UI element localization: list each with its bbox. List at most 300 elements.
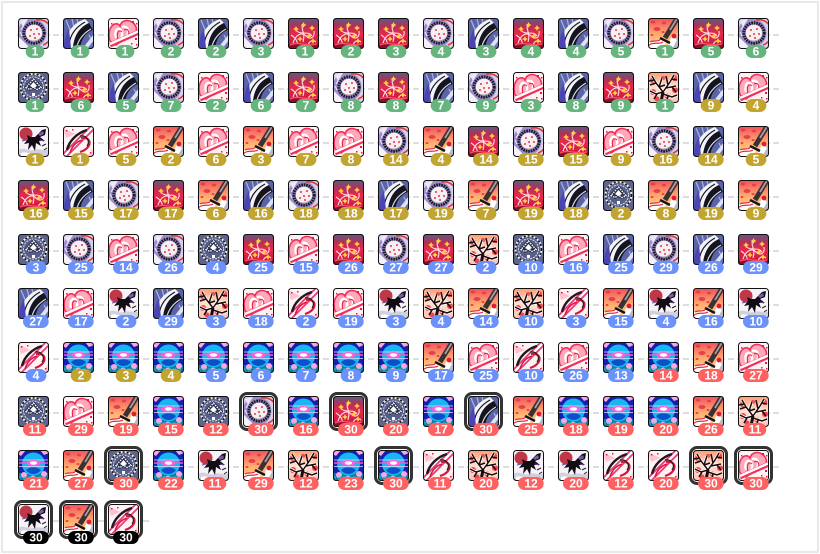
icon: slash, maxed level 30: 30: [119, 530, 133, 544]
icon: blade, level 9: [693, 72, 724, 112]
icon: orb, level 16: [648, 126, 682, 166]
icon: blue ball, level 19: [603, 396, 634, 436]
icon: blue ball, level 2: [63, 342, 94, 382]
icon: katana, level 18: 18: [704, 368, 718, 382]
row 10: black level badges: [16, 502, 152, 544]
row 5: blue level badges: [17, 234, 782, 274]
icon: tree, level 20: 20: [479, 476, 493, 490]
icon: slash, level 10: 10: [524, 368, 538, 382]
icon: orb, level 7: 7: [168, 98, 175, 112]
icon: silver diamond, level 4: [198, 234, 229, 274]
icon: katana, level 25: [513, 395, 544, 436]
icon: red firework, level 2: 2: [348, 44, 355, 58]
icon: dark figure, level 4: 4: [663, 314, 670, 328]
icon: katana, level 14: [468, 287, 499, 328]
icon: slash, level 11: [423, 450, 454, 490]
icon: orb, level 18: 18: [299, 206, 313, 220]
icon: slash, level 10: [513, 342, 544, 382]
icon: pink swirl, level 9: 9: [618, 152, 625, 166]
icon: blue ball, level 21: [18, 450, 49, 490]
icon: silver diamond, level 12: 12: [209, 422, 223, 436]
row 4: gold level badges: [17, 179, 782, 220]
icon: blue ball, level 7: 7: [303, 368, 310, 382]
icon: slash, level 4: 4: [33, 368, 40, 382]
icon: silver diamond, level 2: 2: [618, 206, 625, 220]
icon: katana, level 17: [423, 341, 454, 382]
icon: red firework, level 17: 17: [164, 206, 178, 220]
icon: blade, level 3: [468, 18, 499, 58]
icon: dark figure, level 3: 3: [393, 314, 400, 328]
icon: katana, level 16: [693, 287, 724, 328]
icon: blue ball, level 17: 17: [434, 422, 448, 436]
icon: blade, level 27: 27: [29, 314, 43, 328]
icon: dark figure, level 10: [738, 288, 769, 328]
icon: pink swirl, level 1: [108, 18, 139, 58]
icon: orb, level 6: 6: [753, 44, 760, 58]
icon: pink swirl, level 6: 6: [213, 152, 220, 166]
row 7: blue, gold and red level badges: [17, 341, 782, 382]
icon: blue ball, level 13: [603, 342, 634, 382]
icon: red firework, level 14: 14: [479, 152, 493, 166]
icon: slash, level 20: [648, 450, 679, 490]
icon: blade, level 6: 6: [258, 98, 265, 112]
icon: blade, level 25: 25: [614, 260, 628, 274]
icon: silver diamond, level 1: 1: [32, 98, 39, 112]
icon: blue ball, level 4: [153, 342, 184, 382]
icon: dark figure, level 11: 11: [209, 476, 222, 490]
icon: blade, level 1: 1: [77, 44, 84, 58]
icon: blade, level 26: 26: [704, 260, 718, 274]
icon: katana, level 18: [693, 341, 724, 382]
icon: orb, level 1: 1: [32, 44, 39, 58]
icon: blue ball, maxed level 30: [376, 448, 412, 490]
icon: blue ball, level 16: 16: [299, 422, 313, 436]
row 1: green level badges: [17, 17, 782, 58]
icon: red firework, level 29: [738, 234, 769, 274]
icon: red firework, level 3: 3: [393, 44, 400, 58]
icon: red firework, level 15: [558, 126, 589, 166]
icon: dark figure, level 12: [513, 450, 544, 490]
icon: blue ball, level 5: [198, 342, 229, 382]
icon: dark figure, level 4: [648, 288, 679, 328]
icon: pink swirl, level 25: [468, 342, 499, 382]
icon: pink swirl, level 26: 26: [569, 368, 583, 382]
icon: pink swirl, level 8: 8: [348, 152, 355, 166]
icon: katana, level 26: [693, 395, 724, 436]
icon: orb, level 2: [152, 18, 187, 58]
icon: katana, level 29: [243, 449, 274, 490]
icon: blade, level 7: 7: [438, 98, 445, 112]
icon: blade, level 27: [18, 288, 49, 328]
icon: blue ball, maxed level 30: 30: [389, 476, 403, 490]
icon: red firework, level 1: [288, 18, 319, 58]
icon: red firework, level 17: [153, 180, 184, 220]
icon: red firework, level 9: 9: [618, 98, 625, 112]
icon: blade, maxed level 30: 30: [479, 422, 493, 436]
icon: blade, level 18: [558, 180, 589, 220]
icon: dark figure, level 2: 2: [123, 314, 130, 328]
icon: dark figure, level 12: 12: [524, 476, 538, 490]
icon: pink swirl, level 14: [108, 234, 139, 274]
icon: blade, level 26: [693, 234, 724, 274]
row 9: red level badges: [17, 448, 782, 490]
icon: red firework, level 27: 27: [434, 260, 448, 274]
icon: slash, level 2: 2: [303, 314, 310, 328]
icon: red firework, level 8: [378, 72, 409, 112]
icon: dark figure, level 3: [378, 288, 409, 328]
icon: orb, level 29: 29: [659, 260, 673, 274]
icon: red firework, level 25: 25: [254, 260, 268, 274]
icon: orb, level 3: [242, 18, 277, 58]
icon: slash, level 3: [558, 288, 589, 328]
icon: orb, level 14: 14: [389, 152, 403, 166]
icon: silver diamond, level 11: [18, 396, 49, 436]
icon: blade, level 16: [243, 180, 274, 220]
icon: pink swirl, level 26: [558, 342, 589, 382]
icon: silver diamond, level 3: 3: [33, 260, 40, 274]
icon: pink swirl, level 29: [63, 396, 94, 436]
icon: tree, level 10: [513, 288, 544, 328]
icon: katana, level 2: 2: [168, 152, 175, 166]
icon: slash, level 4: [18, 342, 49, 382]
icon: blade, level 19: [693, 180, 724, 220]
icon: blade, level 5: 5: [123, 98, 130, 112]
icon: pink swirl, level 15: 15: [299, 260, 313, 274]
icon: red firework, level 18: [333, 180, 364, 220]
icon: silver diamond, level 20: 20: [389, 422, 403, 436]
icon: blue ball, level 5: 5: [213, 368, 220, 382]
icon: blue ball, level 8: 8: [348, 368, 355, 382]
icon: dark figure, level 2: [108, 288, 139, 328]
icon: blue ball, level 14: 14: [659, 368, 673, 382]
icon: red firework, level 1: 1: [302, 44, 309, 58]
icon: blade, level 8: 8: [573, 98, 580, 112]
icon: tree, level 11: [738, 396, 769, 436]
icon: silver diamond, level 12: [198, 396, 229, 436]
icon: silver diamond, level 2: [603, 180, 634, 220]
icon: blade, level 3: 3: [483, 44, 490, 58]
icon: pink swirl, level 8: [333, 126, 364, 166]
icon: orb, level 26: [152, 234, 187, 274]
icon: orb, level 19: [422, 180, 457, 220]
icon: katana, level 25: 25: [524, 422, 538, 436]
icon: katana, level 27: [63, 449, 94, 490]
icon: katana, level 7: 7: [483, 206, 490, 220]
icon: blue ball, level 20: [648, 396, 679, 436]
icon: pink swirl, level 16: 16: [569, 260, 583, 274]
icon: blue ball, level 6: [243, 342, 274, 382]
icon: tree, level 20: [468, 450, 499, 490]
icon: dark figure, maxed level 30: 30: [29, 530, 43, 544]
icon: silver diamond, level 20: [378, 396, 409, 436]
icon: orb, level 17: 17: [119, 206, 133, 220]
icon: blade, level 1: [63, 18, 94, 58]
icon: pink swirl, level 29: 29: [74, 422, 88, 436]
icon: red firework, level 26: [333, 234, 364, 274]
icon: katana, level 19: [108, 395, 139, 436]
icon: blue ball, level 18: 18: [569, 422, 583, 436]
icon: blue ball, level 9: [378, 342, 409, 382]
icon: pink swirl, level 18: 18: [254, 314, 268, 328]
icon: orb, level 3: 3: [258, 44, 265, 58]
icon: pink swirl, level 5: [108, 126, 139, 166]
icon: orb, level 27: [378, 234, 412, 274]
row 8: red level badges: [17, 394, 782, 436]
icon: red firework, level 5: [693, 18, 724, 58]
icon: katana, level 1: [648, 17, 679, 58]
icon: katana, maxed level 30: 30: [74, 530, 88, 544]
icon: blue ball, level 16: [288, 396, 319, 436]
icon: tree, level 3: 3: [213, 314, 220, 328]
icon: pink swirl, level 7: 7: [303, 152, 310, 166]
icon: dark figure, level 1: [18, 126, 49, 166]
icon: katana, level 1: 1: [662, 44, 669, 58]
icon: tree, level 1: 1: [662, 98, 669, 112]
icon: slash, level 11: 11: [434, 476, 447, 490]
icon: red firework, level 29: 29: [749, 260, 763, 274]
icon: red firework, level 19: [513, 180, 544, 220]
icon: pink swirl, level 19: [333, 288, 364, 328]
icon: pink swirl, level 2: 2: [213, 98, 220, 112]
icon: katana, level 16: 16: [704, 314, 718, 328]
icon: red firework, level 2: [333, 18, 364, 58]
icon: katana, level 6: 6: [213, 206, 220, 220]
icon: pink swirl, level 7: [288, 126, 319, 166]
icon: blue ball, level 4: 4: [168, 368, 175, 382]
icon: blue ball, level 3: [108, 342, 139, 382]
icon: blue ball, level 13: 13: [614, 368, 628, 382]
icon: orb, level 5: [602, 18, 637, 58]
icon: orb, level 4: [422, 18, 457, 58]
icon: orb, level 8: 8: [348, 98, 355, 112]
icon: slash, level 20: 20: [659, 476, 673, 490]
icon: blade, level 4: [558, 18, 589, 58]
icon: red firework, level 6: 6: [78, 98, 85, 112]
icon: blue ball, level 23: [333, 450, 364, 490]
icon: blade, level 4: 4: [573, 44, 580, 58]
icon: tree, level 2: 2: [483, 260, 490, 274]
icon: slash, level 12: 12: [614, 476, 628, 490]
icon: pink swirl, maxed level 30: [736, 448, 772, 490]
icon: katana, level 7: [468, 179, 499, 220]
icon: katana, level 9: 9: [753, 206, 760, 220]
icon: katana, level 2: [153, 125, 184, 166]
icon: silver diamond, level 10: [513, 234, 544, 274]
icon: katana, level 6: [198, 179, 229, 220]
icon: pink swirl, level 19: 19: [344, 314, 358, 328]
icon: dark figure, level 20: [558, 450, 589, 490]
icon: red firework, maxed level 30: 30: [344, 422, 358, 436]
icon: orb, maxed level 30: 30: [254, 422, 268, 436]
icon: tree, level 3: [198, 288, 229, 328]
icon: pink swirl, maxed level 30: 30: [749, 476, 763, 490]
icon: katana, level 9: [738, 179, 769, 220]
icon: blue ball, level 19: 19: [614, 422, 628, 436]
icon: blue ball, level 21: 21: [29, 476, 43, 490]
icon: orb, level 14: [378, 126, 412, 166]
icon: orb, level 29: [648, 234, 682, 274]
icon: pink swirl, level 25: 25: [479, 368, 493, 382]
icon: katana, level 5: [738, 125, 769, 166]
icon: tree, maxed level 30: [690, 448, 726, 490]
icon: red firework, level 27: [423, 234, 454, 274]
icon: pink swirl, level 6: [198, 126, 229, 166]
icon: pink swirl, level 4: [738, 72, 769, 112]
icon: blade, level 18: 18: [569, 206, 583, 220]
icon: slash, level 1: [63, 126, 94, 166]
icon: orb, level 8: [332, 72, 367, 112]
icon: orb, level 18: [288, 180, 322, 220]
icon: red firework, level 14: [468, 126, 499, 166]
icon: red firework, level 8: 8: [393, 98, 400, 112]
icon: katana, level 19: 19: [119, 422, 133, 436]
icon: katana, level 17: 17: [434, 368, 448, 382]
icon: pink swirl, level 5: 5: [123, 152, 130, 166]
icon: slash, level 1: 1: [77, 152, 84, 166]
icon: katana, level 3: [243, 125, 274, 166]
icon: slash, level 3: 3: [573, 314, 580, 328]
icon: blade, level 25: [603, 234, 634, 274]
icon: blue ball, level 8: [333, 342, 364, 382]
icon: red firework, level 26: 26: [344, 260, 358, 274]
icon: pink swirl, level 27: [738, 342, 769, 382]
icon: katana, level 5: 5: [753, 152, 760, 166]
icon: pink swirl, level 17: [63, 288, 94, 328]
icon: red firework, level 7: 7: [303, 98, 310, 112]
icon: silver diamond, level 3: [18, 234, 49, 274]
icon: blue ball, level 2: 2: [78, 368, 85, 382]
icon: red firework, level 15: 15: [569, 152, 583, 166]
icon: orb, level 6: [738, 18, 772, 58]
icon: pink swirl, level 15: [288, 234, 319, 274]
icon: dark figure, level 11: [198, 450, 229, 490]
icon: blade, level 19: 19: [704, 206, 718, 220]
icon: pink swirl, level 16: [558, 234, 589, 274]
icon: katana, level 8: 8: [663, 206, 670, 220]
icon: blade, level 2: 2: [213, 44, 220, 58]
icon: katana, level 29: 29: [254, 476, 268, 490]
icon: silver diamond, maxed level 30: [106, 448, 142, 490]
icon: silver diamond, level 11: 11: [29, 422, 42, 436]
icon: katana, level 26: 26: [704, 422, 718, 436]
icon: pink swirl, level 1: 1: [122, 44, 129, 58]
icon: blade, level 16: 16: [254, 206, 268, 220]
row 6: blue level badges: [17, 287, 782, 328]
icon: tree, level 10: 10: [524, 314, 538, 328]
icon: blade, level 29: 29: [164, 314, 178, 328]
icon: blue ball, level 17: [423, 396, 454, 436]
icon: orb, level 1: [18, 18, 52, 58]
icon: orb, level 9: 9: [483, 98, 490, 112]
row 2: green to gold level badges: [17, 72, 782, 112]
icon: tree, maxed level 30: 30: [704, 476, 718, 490]
icon: orb, level 26: 26: [164, 260, 178, 274]
icon: blade, level 14: [693, 126, 724, 166]
icon: silver diamond, level 4: 4: [213, 260, 220, 274]
icon: blade, level 7: [423, 72, 454, 112]
icon: silver diamond, level 10: 10: [524, 260, 538, 274]
icon: tree, level 11: 11: [749, 422, 762, 436]
icon: orb, level 17: [108, 180, 142, 220]
icon: orb, level 25: [62, 234, 97, 274]
icon: pink swirl, level 3: 3: [528, 98, 535, 112]
icon: red firework, level 6: [63, 72, 94, 112]
icon: blue ball, level 15: 15: [164, 422, 178, 436]
icon: katana, level 27: 27: [74, 476, 88, 490]
icon: tree, level 12: [288, 450, 319, 490]
icon: slash, level 2: [288, 288, 319, 328]
icon: katana, level 3: 3: [258, 152, 265, 166]
icon: blade, level 14: 14: [704, 152, 718, 166]
icon: silver diamond, level 1: [18, 72, 49, 112]
icon: pink swirl, level 4: 4: [753, 98, 760, 112]
icon: red firework, level 9: [603, 72, 634, 112]
icon: orb, level 5: 5: [618, 44, 625, 58]
icon: blade, level 6: [243, 72, 274, 112]
icon: blue ball, level 7: [288, 342, 319, 382]
icon: red firework, level 19: 19: [524, 206, 538, 220]
icon: red firework, level 5: 5: [708, 44, 715, 58]
icon: pink swirl, level 27: 27: [749, 368, 763, 382]
icon: pink swirl, level 2: [198, 72, 229, 112]
icon: blade, level 29: [153, 288, 184, 328]
row 3: gold level badges: [17, 125, 782, 166]
icon: blue ball, level 22: 22: [164, 476, 178, 490]
icon: katana, level 4: [423, 125, 454, 166]
icon: blue ball, level 23: 23: [344, 476, 358, 490]
icon: blade, level 5: [108, 72, 139, 112]
icon: slash, level 12: [603, 450, 634, 490]
icon: orb, level 4: 4: [438, 44, 445, 58]
icon: red firework, level 7: [288, 72, 319, 112]
icon: dark figure, level 20: 20: [569, 476, 583, 490]
icon: blade, level 17: 17: [389, 206, 403, 220]
icon: pink swirl, level 3: [513, 72, 544, 112]
icon: blue ball, level 18: [558, 396, 589, 436]
icon: orb, maxed level 30: [240, 394, 277, 436]
icon: orb, level 27: 27: [389, 260, 403, 274]
icon: pink swirl, level 9: [603, 126, 634, 166]
icon: red firework, level 16: 16: [29, 206, 43, 220]
icon: red firework, level 18: 18: [344, 206, 358, 220]
icon: blue ball, level 9: 9: [393, 368, 400, 382]
icon: orb, level 9: [468, 72, 502, 112]
icon: katana, level 15: [603, 287, 634, 328]
icon: tree, level 2: [468, 234, 499, 274]
icon: blade, maxed level 30: [466, 394, 502, 436]
icon: blue ball, level 22: [153, 450, 184, 490]
icon: silver diamond, maxed level 30: 30: [119, 476, 133, 490]
icon: orb, level 19: 19: [434, 206, 448, 220]
icon: red firework, level 4: [513, 18, 544, 58]
icon: tree, level 4: [423, 288, 454, 328]
icon: orb, level 16: 16: [659, 152, 673, 166]
icon: blue ball, level 6: 6: [258, 368, 265, 382]
icon: orb, level 15: 15: [524, 152, 538, 166]
icon: red firework, level 16: [18, 180, 49, 220]
icon: blade, level 9: 9: [708, 98, 715, 112]
icon: orb, level 2: 2: [168, 44, 175, 58]
icon: tree, level 1: [648, 72, 679, 112]
icon: orb, level 15: [512, 126, 547, 166]
icon: pink swirl, level 14: 14: [119, 260, 133, 274]
icon: blue ball, level 20: 20: [659, 422, 673, 436]
icon: red firework, level 4: 4: [528, 44, 535, 58]
icon: blue ball, level 14: [648, 342, 679, 382]
icon: katana, level 4: 4: [438, 152, 445, 166]
icon: red firework, level 25: [243, 234, 274, 274]
icon: orb, level 25: 25: [74, 260, 88, 274]
